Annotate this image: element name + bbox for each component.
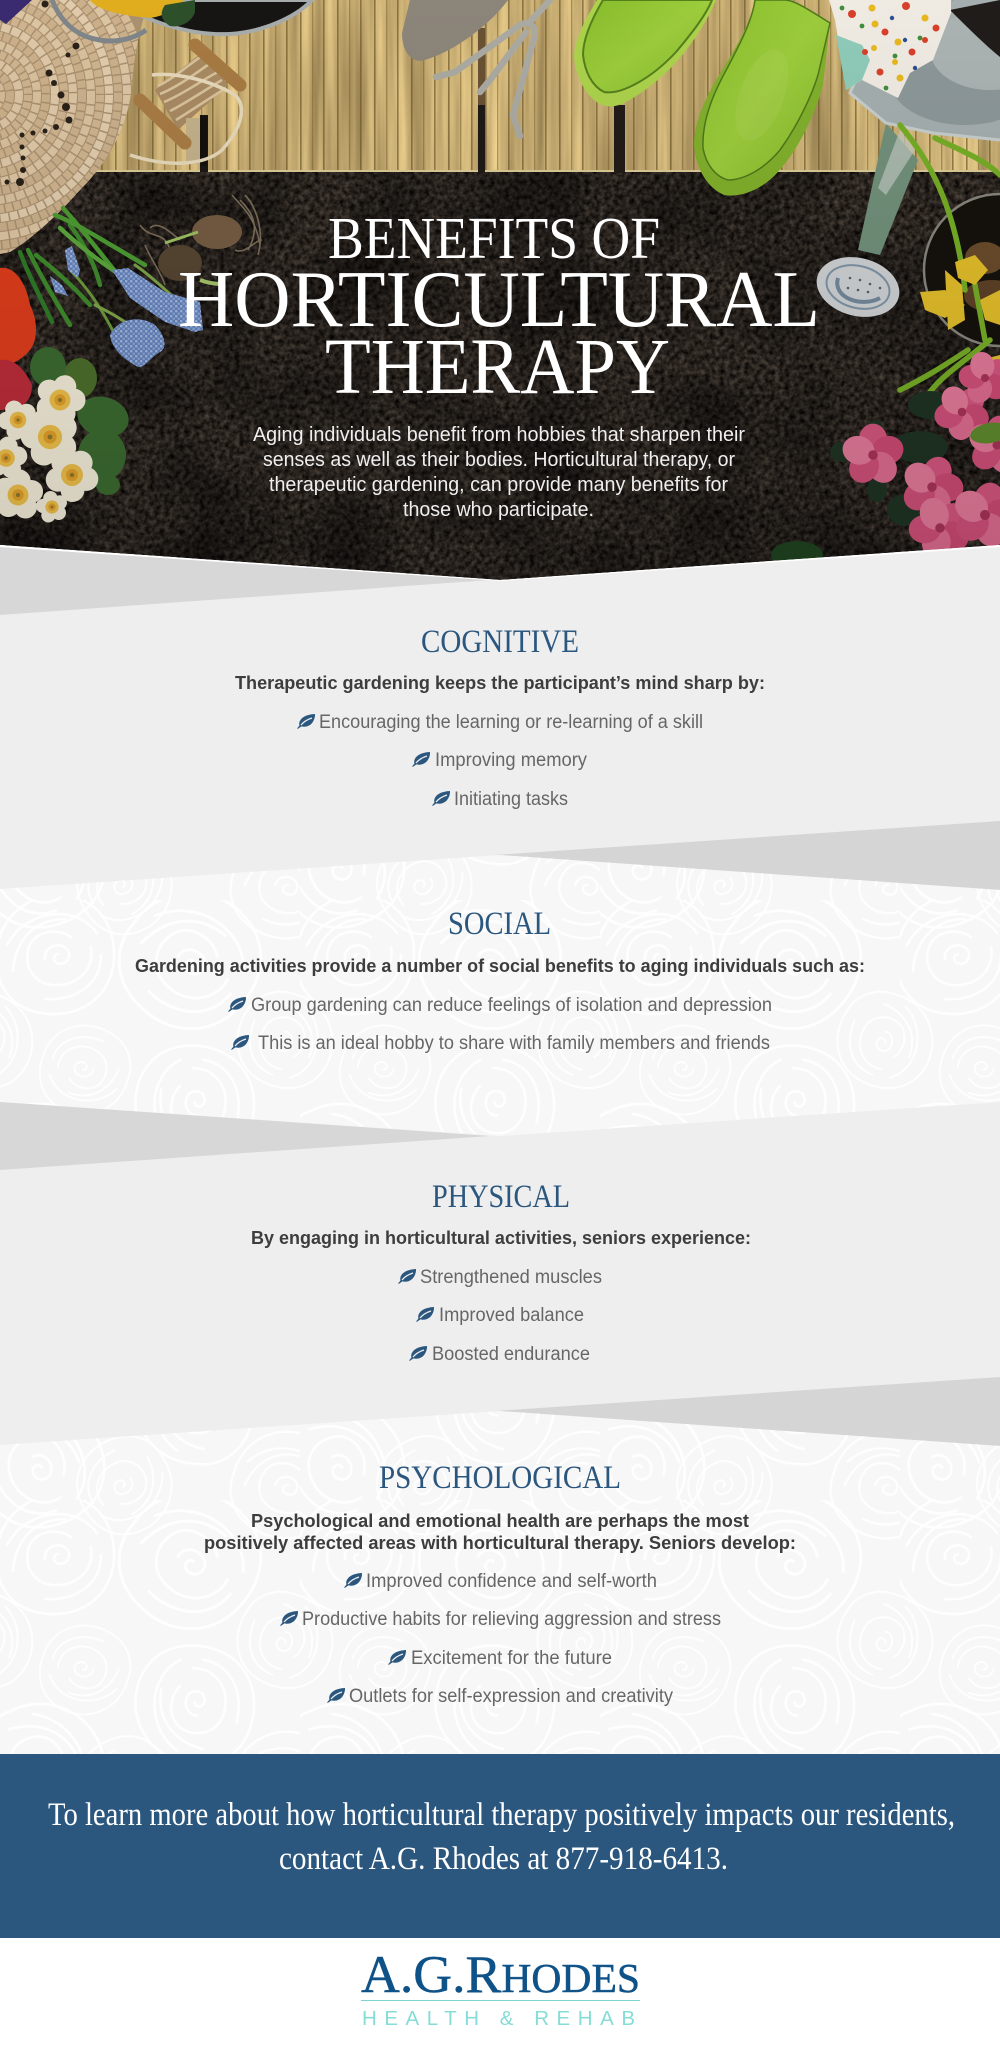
heading: social: SOCIAL xyxy=(448,906,551,942)
panel: cognitive section background xyxy=(0,545,1000,890)
list item: group gardening: Group gardening can reduce feelings of isolation and depression xyxy=(251,995,772,1016)
floral gardening glove xyxy=(829,0,951,98)
red tulips xyxy=(0,268,36,410)
lead text: cognitive: Therapeutic gardening keeps the participant’s mind sharp by: xyxy=(235,672,765,693)
lead text: social: Gardening activities provide a number of social benefits to aging individuals such as: xyxy=(135,955,865,976)
list item: learning a skill: Encouraging the learning or re-learning of a skill xyxy=(319,712,703,733)
panel: social section background xyxy=(0,855,1000,1136)
dark photo overlay xyxy=(0,143,1000,578)
white primrose flowers xyxy=(0,375,98,522)
panel: psychological section background xyxy=(0,1411,1000,1754)
panel: physical section background xyxy=(0,1102,1000,1446)
intro paragraph: therapeutic gardening, can provide many benefits for xyxy=(269,474,728,496)
list item: balance: Improved balance xyxy=(439,1305,584,1326)
list item: self-expression: Outlets for self-expression and creativity xyxy=(349,1686,673,1707)
lead text: physical: By engaging in horticultural activities, seniors experience: xyxy=(251,1227,751,1248)
left green boot xyxy=(574,0,716,106)
lead text: psychological: Psychological and emotional health are perhaps the most xyxy=(251,1510,749,1531)
flower bulbs xyxy=(140,195,262,285)
potted daffodils xyxy=(900,125,1000,400)
call to action banner xyxy=(0,1754,1000,1938)
list item: memory: Improving memory xyxy=(435,750,587,771)
wooden deck xyxy=(0,0,1000,173)
list item: muscles: Strengthened muscles xyxy=(420,1267,602,1288)
intro paragraph: those who participate. xyxy=(403,499,594,521)
panel: photo header xyxy=(0,0,1000,582)
lead text: psychological xyxy=(204,1510,796,1553)
list item: endurance: Boosted endurance xyxy=(432,1344,590,1365)
title: BENEFITS OF xyxy=(328,205,660,271)
watering can xyxy=(810,0,1000,325)
pink azalea flowers xyxy=(830,352,1000,550)
logo wordmark: A.G.RHODES xyxy=(361,1946,640,2004)
hand cultivator fork xyxy=(436,0,550,136)
title xyxy=(178,205,820,411)
green muscari leaves xyxy=(20,208,177,335)
title: THERAPY xyxy=(325,324,670,411)
primrose leaves xyxy=(30,347,133,495)
lead text: psychological: positively affected areas with horticultural therapy. Seniors develop: xyxy=(204,1532,796,1553)
intro paragraph: Aging individuals benefit from hobbies that sharpen their xyxy=(253,424,745,446)
intro paragraph: senses as well as their bodies. Horticultural therapy, or xyxy=(263,449,735,471)
list item: productive habits: Productive habits for relieving aggression and stress xyxy=(302,1609,721,1630)
soil background xyxy=(0,172,1000,580)
right green boot xyxy=(694,0,830,196)
metal tub with yellow flowers xyxy=(52,0,312,41)
heading: cognitive: COGNITIVE xyxy=(421,624,579,660)
list item: excitement: Excitement for the future xyxy=(411,1648,612,1669)
section: cognitive xyxy=(235,624,765,810)
logo tagline: HEALTH & REHAB xyxy=(362,2007,635,2030)
straw hat xyxy=(0,0,150,255)
footer logo xyxy=(0,1938,1000,2046)
trowel xyxy=(402,0,508,61)
list item: ideal hobby: This is an ideal hobby to share with family members and friends xyxy=(258,1033,770,1054)
heading: psychological: PSYCHOLOGICAL xyxy=(379,1460,621,1496)
title: HORTICULTURAL xyxy=(178,254,820,344)
list item: initiating tasks: Initiating tasks xyxy=(454,789,568,810)
bottom leaf xyxy=(771,541,823,561)
twine spool xyxy=(130,45,241,166)
section: psychological xyxy=(204,1460,796,1707)
section: physical xyxy=(251,1179,751,1365)
section: social xyxy=(135,906,865,1054)
blue muscari blooms xyxy=(50,246,203,367)
call to action banner: contact A.G. Rhodes at 877-918-6413. xyxy=(279,1841,728,1877)
intro paragraph xyxy=(253,424,745,521)
list item: confidence: Improved confidence and self-worth xyxy=(366,1571,657,1592)
heading: physical: PHYSICAL xyxy=(432,1179,570,1215)
